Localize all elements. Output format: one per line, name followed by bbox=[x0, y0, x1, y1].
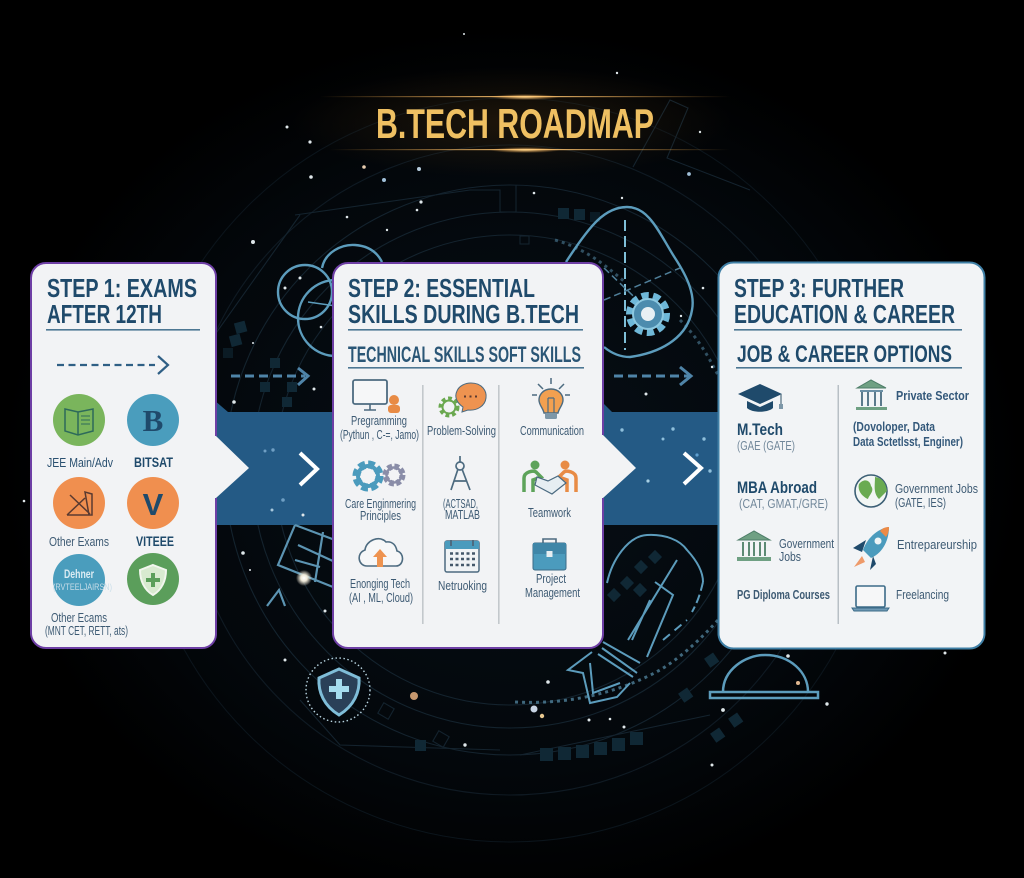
heading: step 1 bbox=[46, 273, 200, 331]
label: project management: Management bbox=[525, 586, 580, 600]
chevron 1 bbox=[300, 453, 317, 485]
line art: cloud bbox=[278, 245, 382, 356]
icon: globe bbox=[855, 475, 887, 507]
heading: step 1: STEP 1: EXAMS bbox=[47, 273, 197, 303]
label: developer roles: (Dovoloper, Data bbox=[853, 420, 936, 434]
label: mba abroad: MBA Abroad bbox=[737, 478, 817, 497]
label: emerging tech: Enonging Tech bbox=[350, 577, 410, 591]
panel: step 2 skills bbox=[333, 263, 636, 648]
label: emerging tech bbox=[349, 577, 413, 605]
column divider bbox=[838, 385, 839, 624]
icon: shield bbox=[127, 553, 179, 605]
label: mba abroad: (CAT, GMAT,/GRE) bbox=[739, 496, 828, 511]
line art: blueprint grid bbox=[267, 525, 335, 606]
background dim squares bbox=[223, 208, 743, 761]
icon: handshake bbox=[524, 460, 576, 494]
label: government jobs: Jobs bbox=[779, 550, 801, 564]
label: government jobs gate: Government Jobs bbox=[895, 482, 978, 496]
icon: light bulb bbox=[532, 378, 570, 419]
label: mba abroad bbox=[737, 478, 828, 511]
icon: V VITEEE: V bbox=[143, 487, 164, 522]
label: problem solving: Problem-Solving bbox=[427, 424, 496, 438]
badge: other bbox=[53, 554, 112, 606]
column dividers bbox=[422, 385, 500, 624]
dashed arrow left bbox=[231, 368, 308, 385]
heading: step 2: STEP 2: ESSENTIAL bbox=[348, 273, 535, 303]
title: B.TECH ROADMAP bbox=[376, 100, 654, 147]
label: other exams list: (MNT CET, RETT, ats) bbox=[45, 624, 128, 638]
icon: calendar bbox=[445, 540, 479, 572]
icon: laptop bbox=[852, 586, 889, 611]
label: government jobs: Government bbox=[779, 537, 834, 551]
label: entrepreneurship: Entrepareurship bbox=[897, 538, 977, 552]
label: programming: Pregramming bbox=[351, 414, 407, 428]
icon: shield emblem bbox=[306, 658, 370, 722]
label: m.tech: M.Tech bbox=[737, 420, 783, 439]
label: programming: (Pythun , C-=, Jamo) bbox=[340, 428, 419, 442]
label: VITEEE: VITEEE bbox=[136, 534, 174, 549]
label: m.tech bbox=[737, 420, 795, 453]
label: cad tools bbox=[443, 497, 480, 522]
dashed arrow right bbox=[614, 367, 691, 385]
label: government jobs gate bbox=[895, 482, 978, 510]
icon: rocket bbox=[853, 527, 889, 570]
label: project management: Project bbox=[536, 572, 566, 586]
icon: cloud upload bbox=[359, 539, 403, 567]
label: networking: Netruoking bbox=[438, 579, 487, 593]
icon: graduation cap bbox=[738, 384, 783, 412]
badge: other: (RVTEELJAIRSN) bbox=[53, 582, 112, 592]
label: JEE: JEE Main/Adv bbox=[47, 456, 114, 470]
icon: B BITSAT: B bbox=[143, 403, 163, 438]
heading: step 2 bbox=[348, 273, 583, 331]
badge: other: Dehner bbox=[64, 567, 94, 581]
label: government jobs bbox=[779, 537, 834, 564]
label: m.tech: (GAE (GATE) bbox=[737, 438, 795, 453]
label: other exams: Other Exams bbox=[49, 535, 109, 549]
label: teamwork: Teamwork bbox=[528, 506, 572, 520]
icon: monitor bbox=[353, 380, 400, 413]
label: cad tools: (ACTSAD, bbox=[443, 497, 478, 511]
icon: gears bbox=[356, 464, 402, 488]
glowing stars bbox=[296, 570, 538, 712]
icon: gear and speech bubble bbox=[441, 383, 486, 415]
label: core engineering: Principles bbox=[360, 509, 401, 523]
panel: step 3 career bbox=[718, 262, 984, 648]
icon: bank green bbox=[737, 531, 771, 561]
label: core engineering: Care Enginmering bbox=[345, 497, 416, 511]
icon: book JEE bbox=[53, 394, 105, 446]
background circuit rings bbox=[138, 98, 882, 842]
label: pg diploma: PG Diploma Courses bbox=[737, 588, 830, 602]
connector band 2 bbox=[600, 400, 720, 525]
connector band 1 bbox=[214, 400, 335, 525]
heading: step 3 bbox=[734, 273, 962, 331]
label: other exams list: Other Ecams bbox=[51, 611, 107, 625]
heading: step 2: SKILLS DURING B.TECH bbox=[348, 299, 579, 329]
title glow bbox=[292, 67, 732, 177]
stars bbox=[23, 33, 946, 766]
heading: step 3: STEP 3: FURTHER bbox=[734, 273, 904, 303]
icon: compass bbox=[451, 456, 470, 490]
label: freelancing: Freelancing bbox=[896, 588, 949, 602]
label: emerging tech: (AI , ML, Cloud) bbox=[349, 591, 413, 605]
line art: light bulb with gear bbox=[566, 207, 693, 357]
label: BITSAT: BITSAT bbox=[134, 455, 174, 470]
label: developer roles: Data Sctetlsst, Enginer) bbox=[853, 435, 963, 449]
line art: hard hat bbox=[710, 655, 818, 698]
icon: briefcase bbox=[533, 539, 566, 570]
background dotted ring bbox=[515, 240, 718, 702]
icon: tools bbox=[53, 477, 105, 529]
label: government jobs gate: (GATE, IES) bbox=[895, 496, 946, 510]
label: core engineering bbox=[345, 497, 416, 523]
icon: bank private bbox=[856, 380, 887, 410]
icon: B BITSAT bbox=[127, 394, 179, 446]
label: private sector: Private Sector bbox=[896, 388, 969, 403]
label: other exams list bbox=[45, 611, 128, 638]
icon: V VITEEE bbox=[127, 477, 179, 529]
label: developer roles bbox=[853, 420, 963, 449]
dashed arrow bbox=[57, 356, 168, 374]
icon: gear bbox=[630, 296, 666, 332]
label: project management bbox=[525, 572, 580, 600]
chevron 2 bbox=[684, 453, 701, 484]
label: cad tools: MATLAB bbox=[445, 508, 480, 522]
label: communication: Communication bbox=[520, 424, 584, 438]
label: programming bbox=[340, 414, 419, 442]
panel: step 1 exams bbox=[31, 263, 249, 648]
subheading: skills: TECHNICAL SKILLS SOFT SKILLS bbox=[348, 342, 581, 367]
line art: rocket bbox=[568, 535, 703, 703]
heading: step 3: EDUCATION & CAREER bbox=[734, 299, 955, 329]
heading: step 1: AFTER 12TH bbox=[47, 299, 162, 329]
